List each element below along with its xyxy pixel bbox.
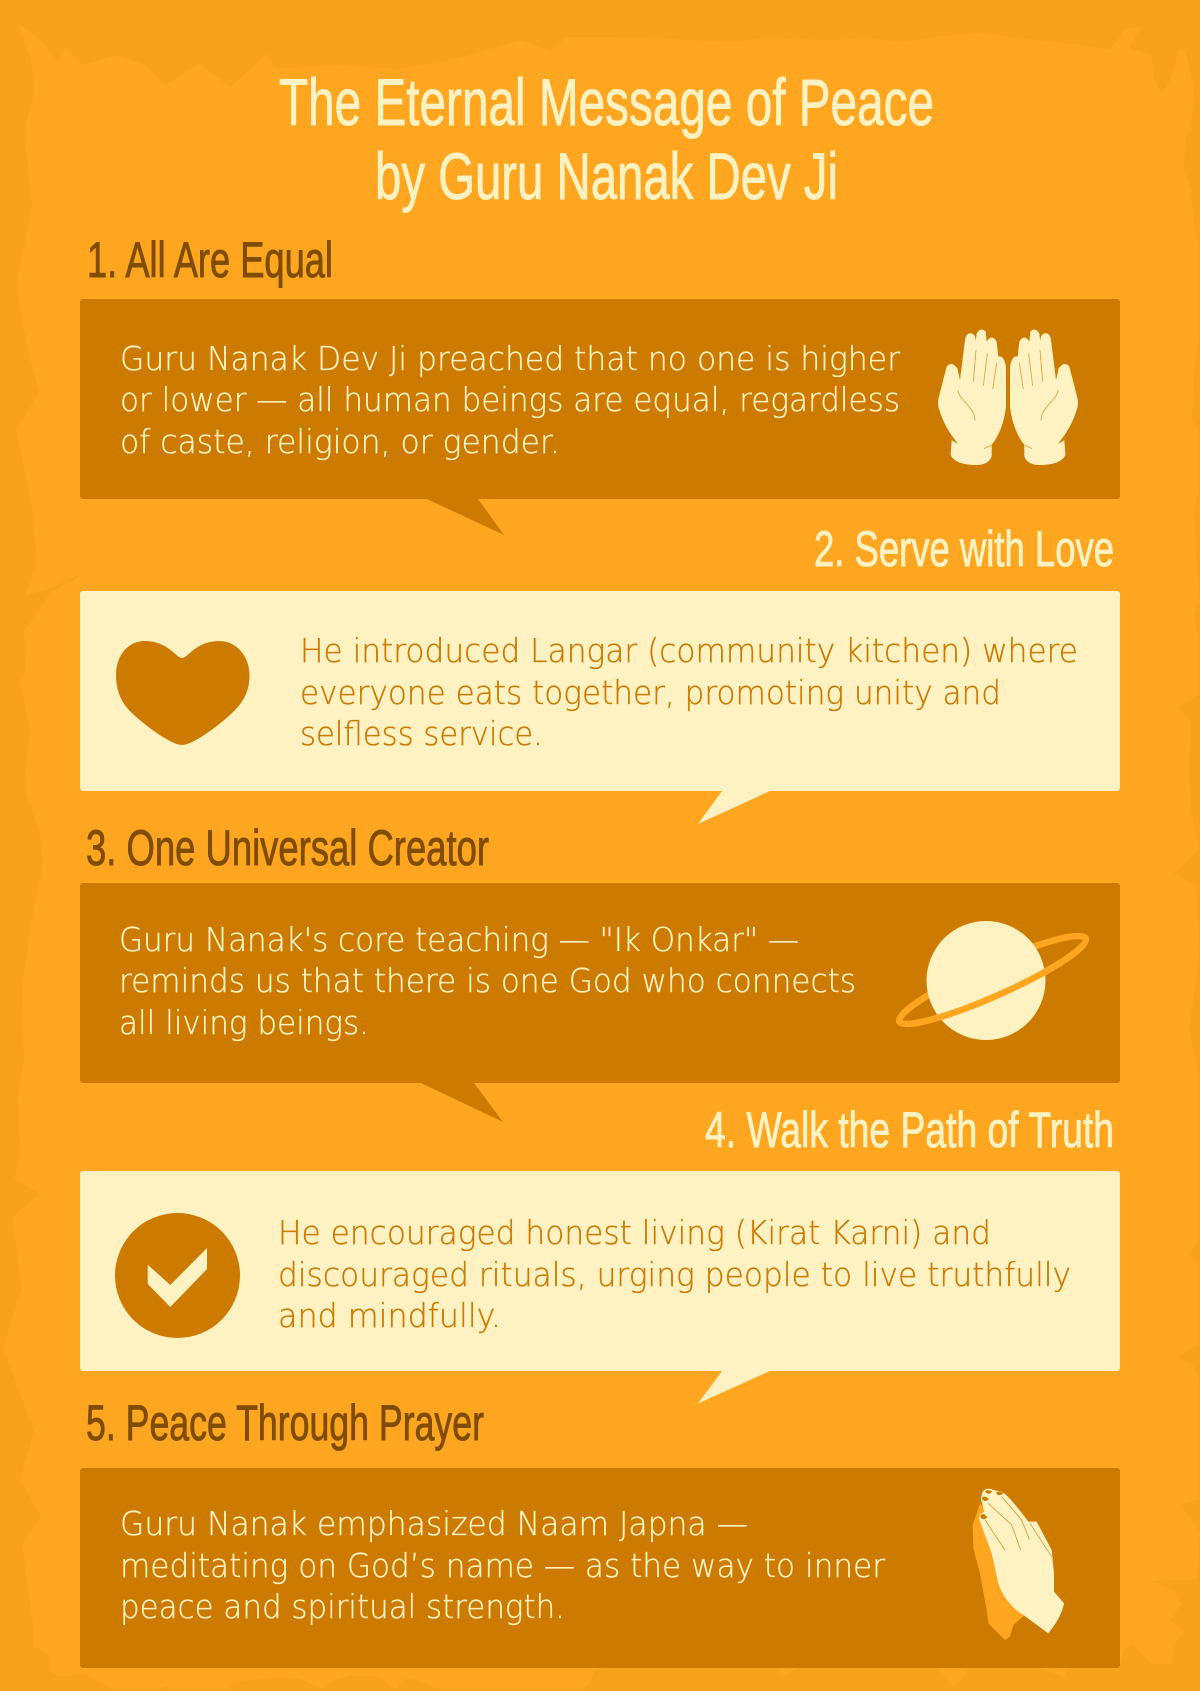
text: truthful living message: and mindfully. [278, 1296, 501, 1335]
icon: heart [116, 641, 250, 745]
heading: All Are Equal: 1. All Are Equal [87, 232, 333, 288]
text: langar message: selfless service. [300, 714, 543, 753]
text: equality message: Guru Nanak Dev Ji preached that no one is higher [120, 339, 900, 378]
icon: open hands [938, 330, 1078, 465]
text: truthful living message [278, 1213, 1071, 1335]
text: equality message [120, 339, 900, 461]
text: equality message: of caste, religion, or gender. [120, 422, 560, 461]
text: truthful living message: He encouraged honest living (Kirat Karni) and [278, 1213, 991, 1252]
text: Ik Onkar message [119, 920, 856, 1042]
text: Ik Onkar message: reminds us that there is one God who connects [119, 961, 856, 1000]
heading: One Universal Creator: 3. One Universal Creator [86, 820, 489, 876]
heading: Peace Through Prayer: 5. Peace Through Prayer [86, 1395, 484, 1451]
text: Naam Japna message: peace and spiritual strength. [120, 1587, 565, 1626]
icon: ringed planet [893, 921, 1092, 1040]
panel: One Universal Creator [80, 883, 1120, 1122]
text: Ik Onkar message: all living beings. [119, 1003, 369, 1042]
text: truthful living message: discouraged rituals, urging people to live truthfully [278, 1255, 1071, 1294]
text: langar message [300, 631, 1078, 753]
title: The Eternal Message of Peace [279, 65, 934, 139]
panel: All Are Equal [80, 299, 1120, 535]
text: Ik Onkar message: Guru Nanak's core teaching — "Ik Onkar" — [119, 920, 799, 959]
panel: Peace Through Prayer [80, 1468, 1120, 1668]
text: Naam Japna message [120, 1504, 885, 1626]
panel: Serve with Love [80, 591, 1120, 824]
panel: Walk the Path of Truth [80, 1171, 1120, 1404]
text: Naam Japna message: meditating on God’s name — as the way to inner [120, 1546, 885, 1585]
text: langar message: everyone eats together, promoting unity and [300, 673, 1001, 712]
title [279, 65, 934, 213]
icon: check mark badge [115, 1213, 240, 1338]
text: Naam Japna message: Guru Nanak emphasized Naam Japna — [120, 1504, 748, 1543]
title: by Guru Nanak Dev Ji [375, 139, 838, 213]
text: langar message: He introduced Langar (community kitchen) where [300, 631, 1078, 670]
text: equality message: or lower — all human beings are equal, regardless [120, 380, 900, 419]
icon: praying hands [973, 1489, 1064, 1640]
